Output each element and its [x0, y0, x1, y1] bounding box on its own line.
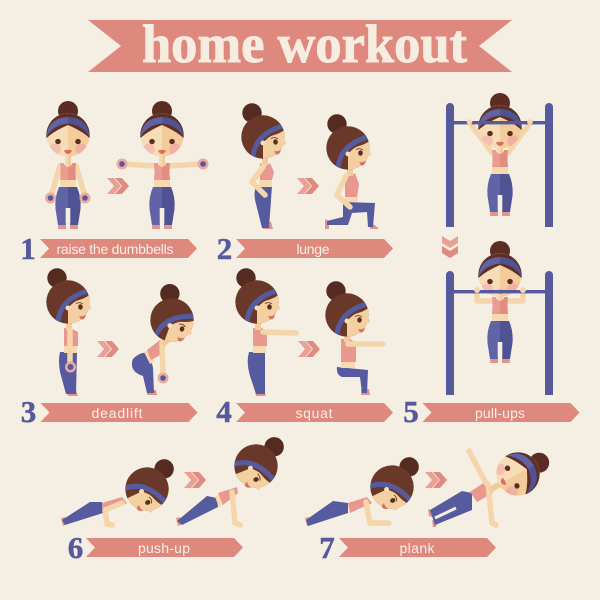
arrow [425, 472, 447, 488]
label: pull-ups [475, 405, 525, 421]
label: plank [400, 540, 436, 556]
panel: lunge [217, 103, 393, 266]
number 7: 7 [319, 530, 335, 565]
figure: arms down [45, 101, 90, 229]
panel: raise the dumbbells [20, 101, 208, 266]
label [86, 538, 243, 557]
panel: plank [305, 439, 558, 565]
arrow: down [442, 236, 458, 258]
label: deadlift [92, 405, 143, 421]
number 3: 3 [21, 394, 36, 429]
panel: deadlift [21, 268, 206, 429]
number 4: 4 [216, 394, 232, 429]
figure: forearm plank [305, 453, 433, 526]
figure: standing [241, 103, 287, 229]
figure: standing [46, 268, 92, 396]
figure: up [176, 433, 296, 526]
figure: side plank [428, 439, 558, 527]
figure: arms raised [116, 101, 208, 229]
label: lunge [296, 241, 330, 257]
label [339, 538, 496, 557]
title banner: home workout [142, 14, 467, 74]
label: squat [296, 405, 333, 421]
figure: squat [325, 281, 383, 395]
figure: standing [235, 268, 296, 396]
arrow [107, 178, 129, 194]
number 2: 2 [217, 231, 232, 266]
number 5: 5 [403, 394, 419, 429]
arrow [97, 341, 119, 357]
figure: pull-up start [446, 93, 553, 227]
arrow [298, 341, 320, 357]
number 1: 1 [20, 231, 36, 266]
figure: down [61, 455, 188, 526]
panel: squat [216, 268, 393, 429]
label [236, 403, 393, 422]
arrow [297, 178, 319, 194]
label [40, 403, 198, 422]
label: raise the dumbbells [56, 241, 174, 257]
number 6: 6 [68, 530, 83, 565]
label [40, 239, 197, 258]
label [236, 239, 393, 258]
figure: lunge [325, 114, 379, 229]
figure: bent over [132, 281, 206, 395]
arrow [184, 472, 206, 488]
label: push-up [138, 540, 190, 556]
panel: pull-ups [403, 93, 580, 429]
panel: push-up [61, 433, 296, 565]
figure: pull-up end [446, 241, 553, 395]
label [422, 403, 580, 422]
